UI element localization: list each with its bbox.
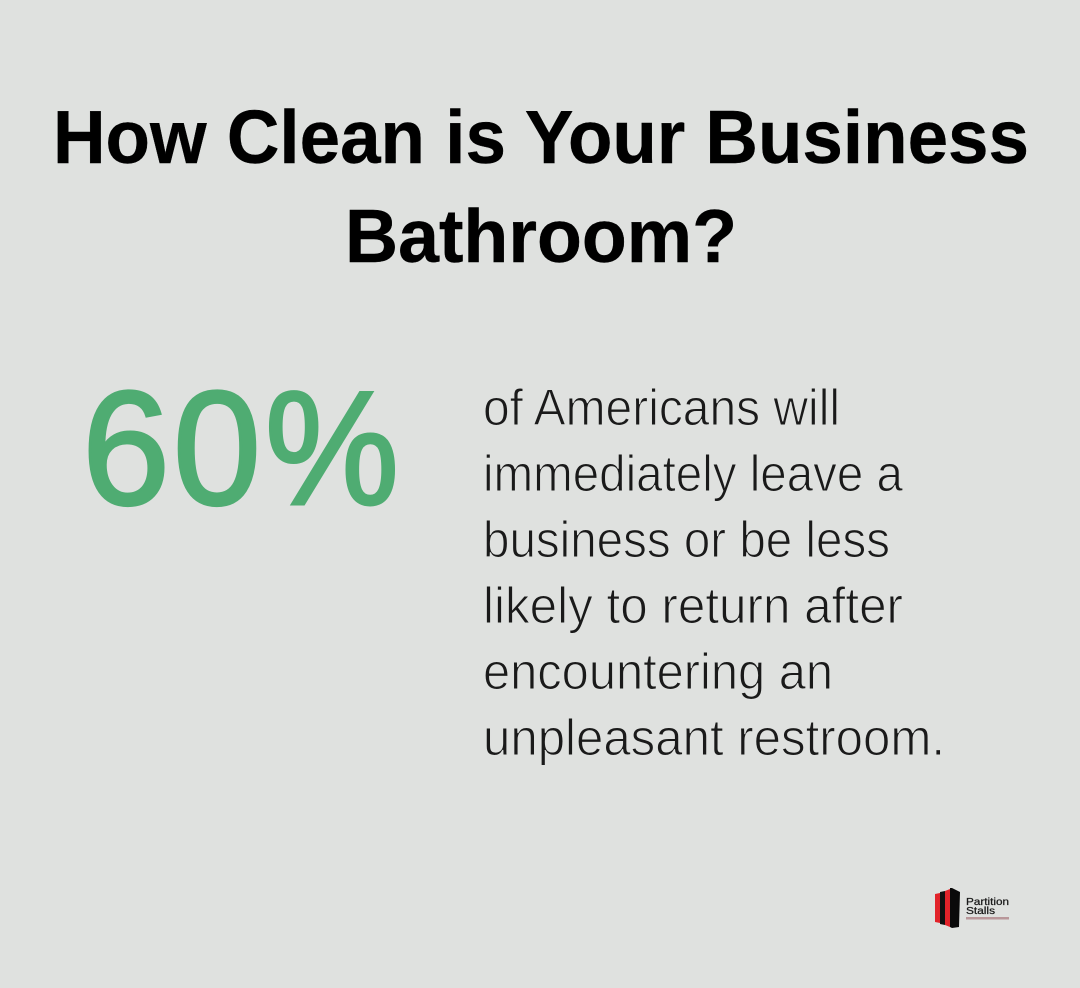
logo wordmark [966,897,1009,917]
description text: encountering an [483,643,833,700]
description text: immediately leave a [483,445,904,502]
description text: likely to return after [483,577,903,634]
description text: business or be less [483,511,890,568]
big statistic: 60% [82,358,399,539]
logo wordmark: Partition [966,897,1009,908]
logo wordmark: Stalls [966,906,995,917]
description text: of Americans will [483,379,840,436]
title: How Clean is Your Business [53,95,1029,179]
logo tagline [966,917,1009,920]
icon: partition panels [935,888,960,928]
big statistic: 60%: 6 [82,358,170,539]
description text [483,379,945,766]
logo: Partition Stalls [935,888,1009,928]
title [53,95,1029,278]
big statistic: 60%: 0 [173,358,261,539]
big statistic: 60%: % [265,358,399,539]
title: Bathroom? [345,194,737,278]
description text: unpleasant restroom. [483,709,945,766]
